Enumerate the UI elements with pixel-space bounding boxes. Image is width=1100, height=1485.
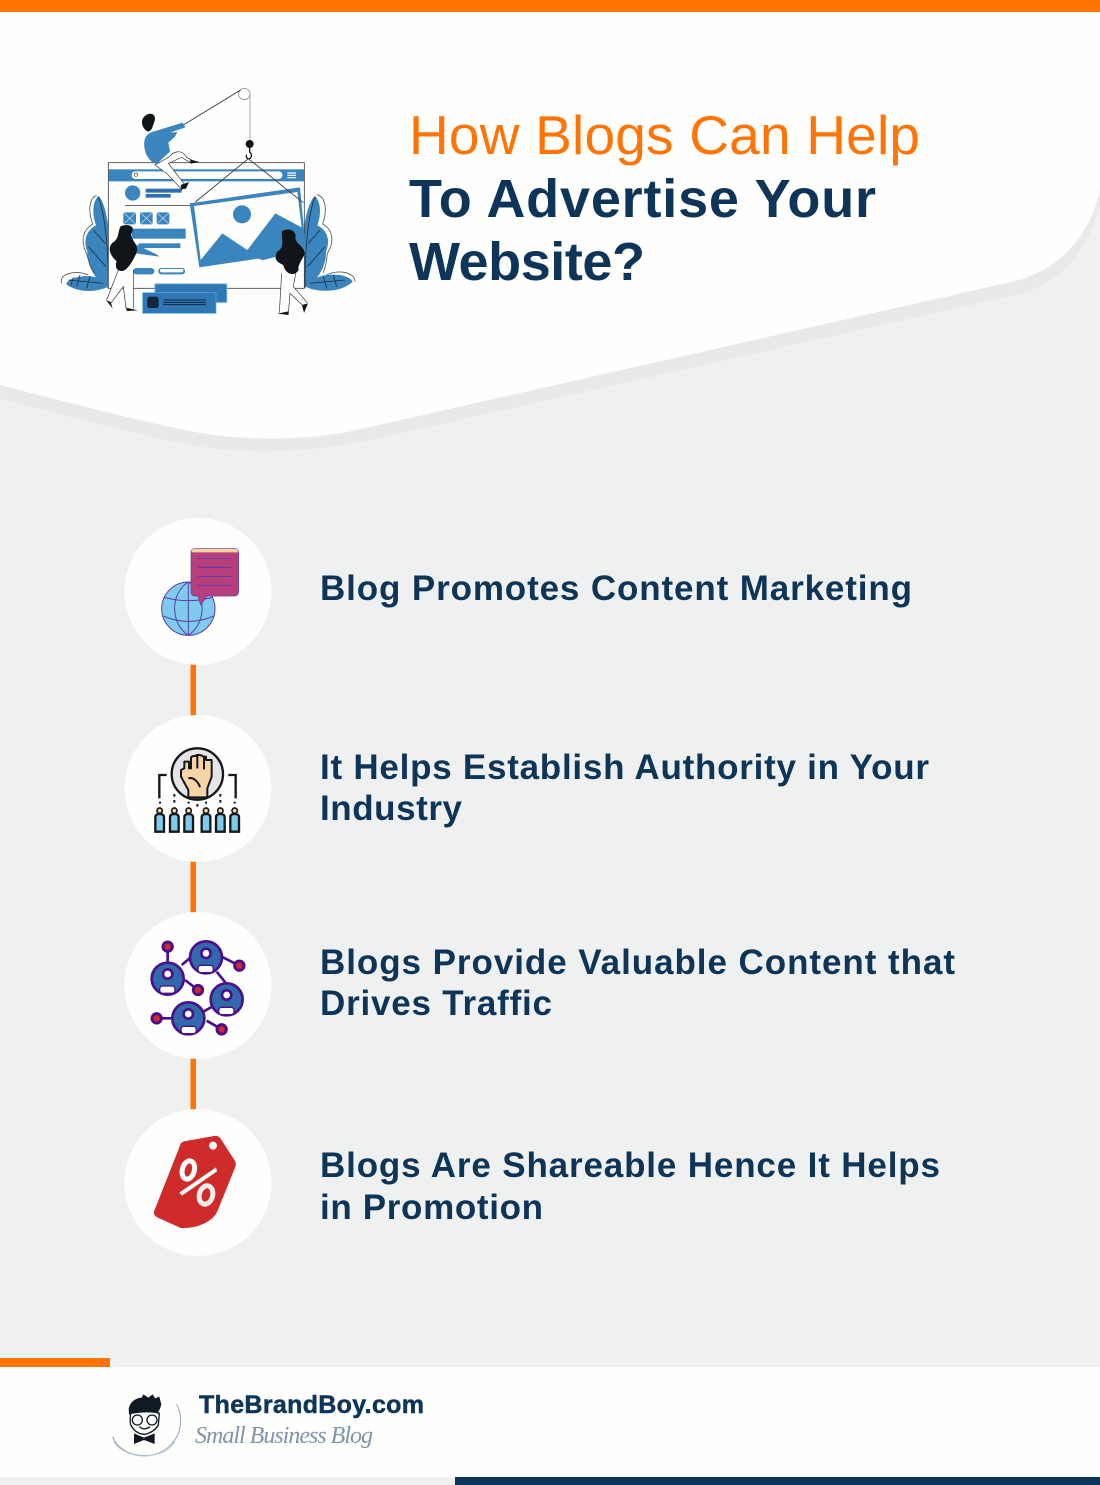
- timeline connectors: [190, 664, 196, 1110]
- heading 1: Blog Promotes Content Marketing: [320, 569, 912, 608]
- item 1: content marketing: [124, 518, 912, 665]
- hoisted picture frame: [190, 187, 306, 267]
- item 2: authority: [124, 715, 929, 862]
- person pulling rope: [142, 114, 199, 189]
- icon: globe with speech bubble: [162, 548, 239, 635]
- icon: network of people: [152, 941, 244, 1034]
- bottom navy bar: [455, 1477, 1100, 1485]
- icon circle 2: [124, 715, 272, 862]
- footer tagline: Small Business Blog: [195, 1423, 373, 1449]
- heading 3: Drives Traffic: [320, 984, 552, 1023]
- header panel: [0, 12, 1100, 439]
- title line 1: How Blogs Can Help: [409, 104, 920, 166]
- icon circle 3: [124, 912, 272, 1059]
- title line 3: Website?: [409, 232, 645, 292]
- footer panel: [0, 1367, 1100, 1477]
- info cards: [143, 284, 227, 313]
- footer orange accent: [0, 1358, 110, 1367]
- illustration: website under construction: [61, 88, 355, 315]
- browser window: [108, 163, 304, 288]
- left plant: [61, 195, 108, 291]
- icon circle 4: [124, 1109, 272, 1256]
- item 4: promotion: [124, 1109, 940, 1256]
- heading 4: in Promotion: [320, 1188, 543, 1227]
- icon: raised fist above crowd: [155, 748, 239, 832]
- person at right: [258, 229, 308, 315]
- title: [409, 104, 920, 292]
- person at left: [106, 225, 159, 311]
- top orange bar: [0, 0, 1100, 12]
- heading 3: [320, 943, 955, 1023]
- heading 4: Blogs Are Shareable Hence It Helps: [320, 1146, 940, 1185]
- title line 2: To Advertise Your: [409, 169, 876, 229]
- heading 2: It Helps Establish Authority in Your: [320, 748, 929, 787]
- icon circle 1: [124, 518, 272, 665]
- right plant: [304, 195, 355, 291]
- footer brand name: TheBrandBoy.com: [199, 1391, 424, 1419]
- heading 2: [320, 748, 929, 828]
- heading 4: [320, 1146, 940, 1227]
- crane rope and hook: [183, 88, 303, 203]
- footer logo: character in circle: [113, 1394, 181, 1456]
- item 3: traffic: [124, 912, 955, 1059]
- heading 3: Blogs Provide Valuable Content that: [320, 943, 955, 982]
- icon: percent price tag: [154, 1136, 236, 1228]
- heading 2: Industry: [320, 789, 463, 828]
